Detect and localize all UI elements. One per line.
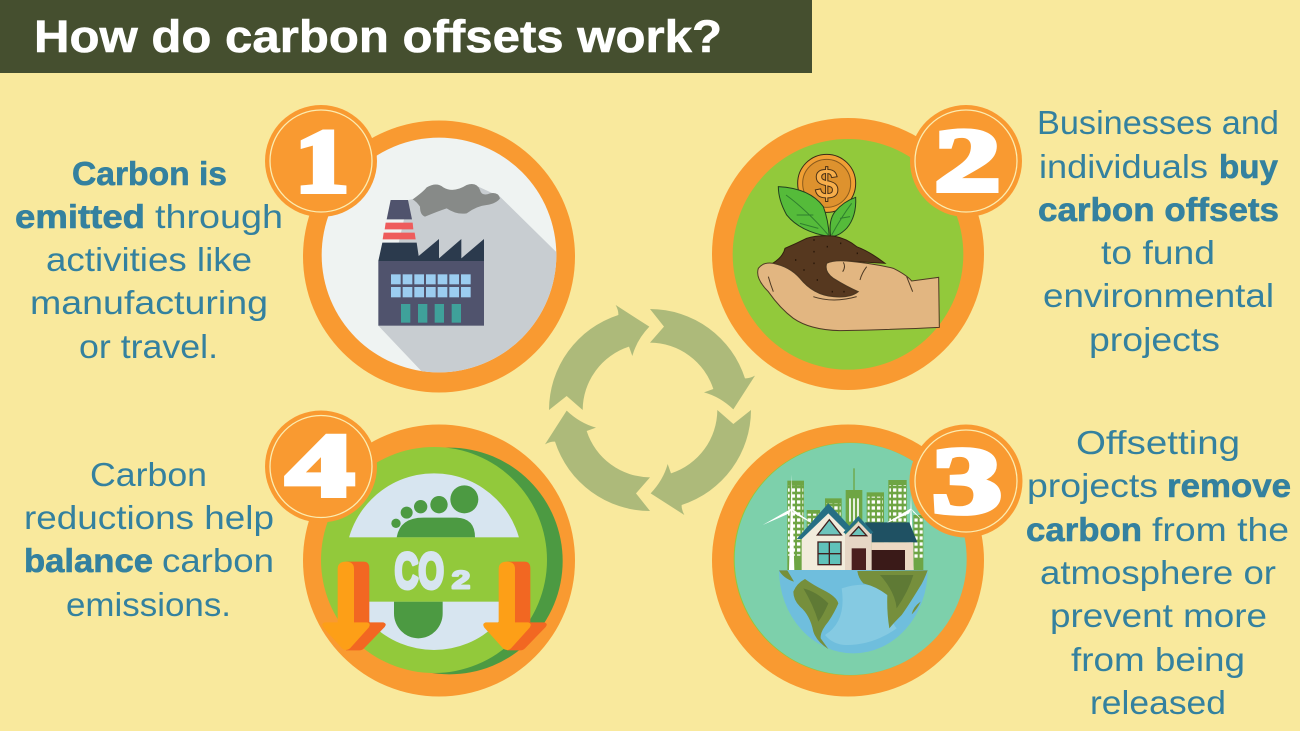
text: step 3 description: released [1090,684,1226,721]
badge: number 2: 2 [934,112,1000,210]
text: step 3 description: from being [1071,641,1245,678]
badge: number 1: 1 [295,112,349,212]
panel: step 1 factory [303,120,575,392]
text: step 3 description: from the [1152,511,1289,548]
badge: number 2 [910,105,1022,217]
text: step 1 description: manufacturing [30,284,268,321]
badge: number 4: 4 [286,416,354,516]
text: step 2 description: projects [1089,321,1220,358]
text: step 2 description: individuals [1039,148,1208,185]
text: step 3 description: projects [1027,467,1158,504]
cycle arrows [545,305,755,515]
text: step 3 description [1026,424,1291,721]
text: step 2 description [1037,104,1279,358]
icon: factory [322,138,560,377]
text: step 3 description: Offsetting [1076,424,1240,461]
badge: number 3: 3 [932,428,1002,534]
text: step 2 description: to fund [1101,234,1215,271]
text: step 3 description: atmosphere or [1040,554,1276,591]
text: step 4 description: emissions. [66,586,231,623]
badge: number 4 [265,410,377,522]
panel: step 3 house on globe [712,424,984,696]
panel: step 2 hand with plant and coin [712,118,984,390]
icon: city, house, turbines and globe [734,443,967,675]
icon: CO2 footprint with down arrows [321,447,563,674]
text: step 4 description: Carbon [90,456,207,493]
text: step 3 description: prevent more [1050,597,1267,634]
text: step 2 description: environmental [1043,277,1274,314]
text: step 1 description: or travel. [79,328,218,365]
text: step 4 description: carbon [162,542,274,579]
panel: step 4 CO2 footprint [303,424,575,696]
text: step 1 description: activities like [46,241,252,278]
title banner [0,0,812,73]
badge: number 3 [910,424,1022,538]
text: step 3 description: carbon [1026,511,1142,548]
text: step 1 description: through [155,198,283,235]
icon: hand, soil, sprout and coin: $ [815,161,839,209]
text: step 2 description: buy [1219,148,1279,185]
text: step 4 description: reductions help [24,499,274,536]
text: step 4 description [24,456,274,623]
text: step 2 description: Businesses and [1037,104,1279,141]
text: step 1 description [15,155,283,365]
text: step 3 description: remove [1167,467,1291,504]
text: step 1 description: Carbon is [72,155,227,192]
icon: CO2 footprint with down arrows: CO [395,543,444,599]
title: How do carbon offsets work? [34,11,722,62]
badge: number 1 [265,105,377,217]
text: step 2 description: carbon offsets [1038,191,1279,228]
icon: CO2 footprint with down arrows: 2 [452,567,470,595]
text: step 1 description: emitted [15,198,145,235]
icon: hand, soil, sprout and coin [733,139,963,370]
text: step 4 description: balance [24,542,153,579]
